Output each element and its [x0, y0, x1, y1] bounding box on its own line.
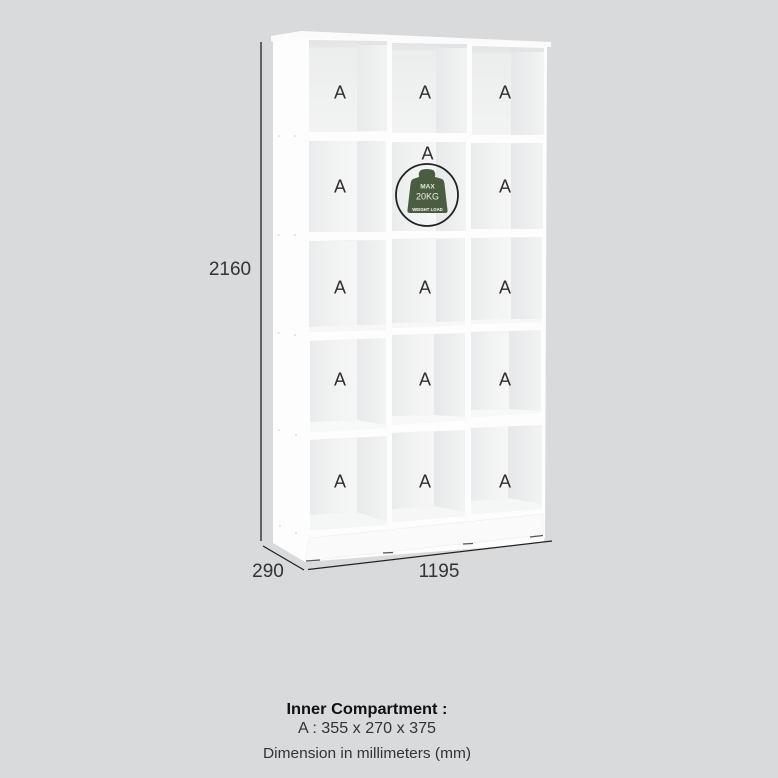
- cell row 1 col 2: A: [419, 82, 431, 102]
- cell row 4 col 3: [471, 330, 541, 417]
- cell row 1 col 1: A: [334, 82, 346, 102]
- cell row 1 col 1: [309, 40, 387, 132]
- cell row 3 col 1: [309, 240, 386, 332]
- cell row 2 col 2: [392, 142, 466, 231]
- cell row 5 col 1: [310, 436, 387, 530]
- cell row 4 col 1: A: [334, 370, 346, 390]
- cell row 3 col 2: A: [419, 278, 431, 298]
- side panel peg holes: [278, 135, 297, 534]
- dimension: depth: [252, 546, 304, 582]
- badge: max 20kg weight load: WEIGHT LOAD: [412, 207, 443, 212]
- shelf body: [273, 36, 547, 562]
- cell row 2 col 1: [309, 141, 386, 232]
- cell row 5 col 2: [392, 430, 465, 522]
- inner compartment note: Dimension in millimeters (mm): [263, 746, 471, 762]
- cell row 2 col 2: A: [421, 144, 434, 164]
- inner compartment note: [263, 701, 471, 762]
- cell row 1 col 3: A: [499, 82, 511, 102]
- badge: max 20kg weight load: [396, 164, 458, 226]
- cell row 5 col 3: A: [499, 472, 511, 492]
- cell row 3 col 3: [471, 237, 542, 324]
- bookshelf: [271, 31, 551, 562]
- cell row 5 col 3: [471, 425, 542, 514]
- cell row 2 col 1: A: [334, 176, 346, 196]
- inner compartment note: Inner Compartment :: [286, 701, 448, 718]
- icon: green weight: [407, 169, 448, 213]
- inner compartment note: A : 355 x 270 x 375: [298, 720, 436, 737]
- dimension: height: 2160: [209, 259, 251, 280]
- dimension: depth: 290: [252, 561, 284, 582]
- badge: max 20kg weight load: MAX: [420, 184, 435, 190]
- cell row 4 col 1: [310, 338, 386, 432]
- dimension: width: 1195: [419, 561, 459, 582]
- cell row 3 col 3: A: [499, 278, 511, 298]
- cell row 4 col 2: [392, 333, 465, 425]
- foot markers: [306, 536, 543, 561]
- cell row 1 col 2: [392, 43, 467, 133]
- cell row 5 col 2: A: [419, 472, 431, 492]
- cell row 3 col 1: A: [334, 278, 346, 298]
- cell row 4 col 3: A: [499, 370, 511, 390]
- dimension: width: [308, 541, 552, 582]
- badge: max 20kg weight load: 20KG: [416, 192, 439, 202]
- top cap: [271, 31, 551, 47]
- cell row 3 col 2: [392, 238, 465, 328]
- base plinth: [305, 514, 543, 561]
- cell row 1 col 3: [472, 46, 544, 135]
- cell row 2 col 3: [471, 143, 543, 229]
- cell row 2 col 3: A: [499, 176, 511, 196]
- cell row 4 col 2: A: [419, 370, 431, 390]
- cell row 5 col 1: A: [334, 472, 346, 492]
